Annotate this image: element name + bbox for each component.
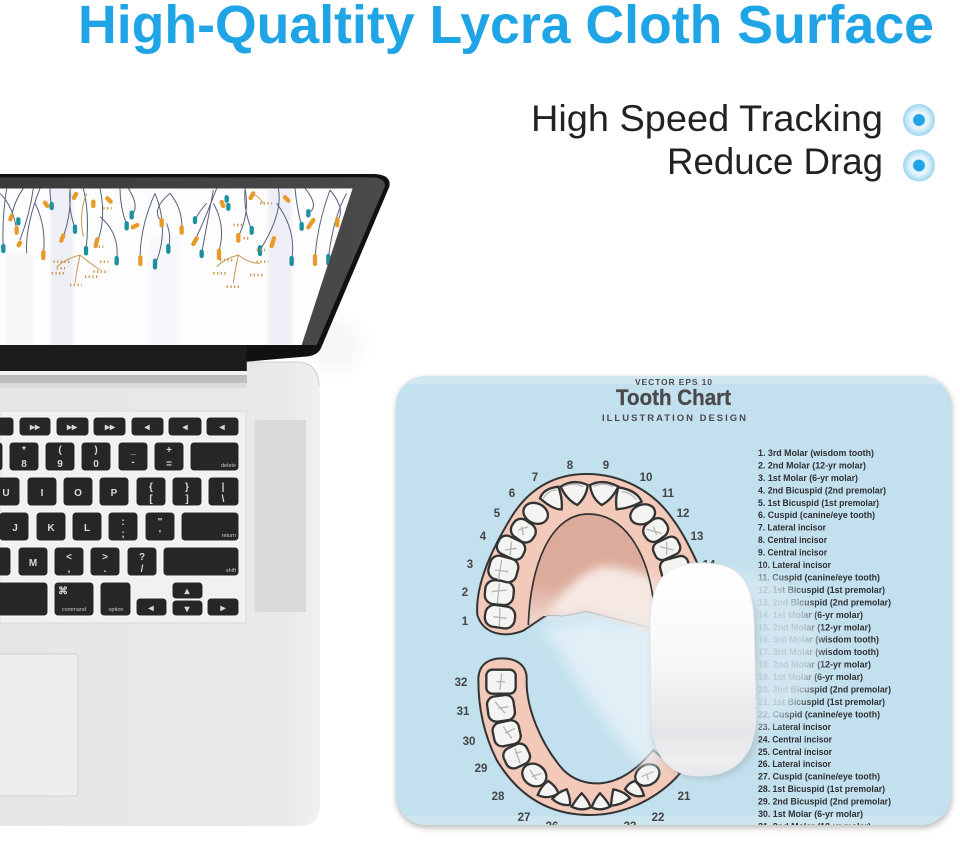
screen wallpaper <box>0 188 353 345</box>
tooth numbers: 31 <box>457 706 470 718</box>
tooth numbers: 2 <box>462 587 468 599</box>
lower gum <box>478 658 680 815</box>
keyboard keys: ⌘ <box>58 586 68 597</box>
keyboard keys: ◂ <box>218 422 225 433</box>
feature: high speed tracking: High Speed Tracking <box>531 98 883 139</box>
tooth legend list: 10. Lateral incisor <box>758 560 831 571</box>
tooth numbers: 6 <box>509 488 515 500</box>
tooth numbers: 29 <box>475 763 487 775</box>
keyboard keys: ◂ <box>143 422 150 433</box>
tooth numbers: 9 <box>603 460 609 472</box>
tooth legend list: 23. Lateral incisor <box>758 722 831 733</box>
keyboard keys: 0 <box>93 459 99 470</box>
tooth numbers: 26 <box>546 821 558 833</box>
tooth numbers: 27 <box>518 812 530 824</box>
hinge strip <box>0 345 247 371</box>
pad surface <box>396 376 951 825</box>
laptop base <box>0 319 361 826</box>
keyboard keys: < <box>66 552 72 563</box>
speaker grille <box>255 420 306 612</box>
tooth legend list: 19. 1st Molar (6-yr molar) <box>758 672 863 683</box>
feature: reduce drag: Reduce Drag <box>667 141 883 182</box>
keyboard keys: return <box>222 533 236 539</box>
mouse reflection over legend <box>682 572 818 728</box>
palate <box>528 514 653 628</box>
keyboard keys: K <box>47 523 55 534</box>
keyboard keys: ▸▸ <box>29 422 41 433</box>
tooth legend list <box>758 448 891 832</box>
tooth legend list: 16. 3rd Molar (wisdom tooth) <box>758 635 879 646</box>
heading: illustration design: ILLUSTRATION DESIGN <box>602 413 746 424</box>
tooth legend list: 28. 1st Bicuspid (1st premolar) <box>758 784 885 795</box>
tooth numbers: 30 <box>463 736 475 748</box>
tooth legend list: 9. Central incisor <box>758 548 827 559</box>
keyboard keys: delete <box>221 463 236 469</box>
feature list <box>531 98 935 182</box>
tooth numbers: 8 <box>567 460 574 472</box>
keyboard keys: ' <box>159 529 161 540</box>
keyboard keys: + <box>166 445 172 456</box>
tooth numbers: 22 <box>652 812 664 824</box>
keyboard keys: ( <box>58 445 62 456</box>
upper teeth <box>484 482 692 630</box>
trackpad <box>0 654 78 796</box>
keyboard keys: command <box>62 607 86 613</box>
keyboard keys: ◂ <box>181 422 188 433</box>
tooth numbers: 11 <box>662 488 675 500</box>
keyboard keys: ▸ <box>219 603 226 614</box>
tooth numbers: 5 <box>494 508 501 520</box>
tooth legend list: 29. 2nd Bicuspid (2nd premolar) <box>758 797 891 808</box>
tooth legend list: 15. 2nd Molar (12-yr molar) <box>758 622 871 633</box>
tooth legend list: 26. Lateral incisor <box>758 759 831 770</box>
tooth numbers: 1 <box>462 616 469 628</box>
keyboard keys: L <box>84 523 90 534</box>
tooth numbers: 32 <box>455 677 467 689</box>
heading: vector eps: VECTOR EPS 10 <box>635 377 712 387</box>
keyboard keys: " <box>158 517 163 528</box>
tooth legend list: 25. Central incisor <box>758 747 832 758</box>
icon: bullet 2 <box>903 150 935 182</box>
tooth numbers: 10 <box>640 472 652 484</box>
tooth numbers: 7 <box>532 472 538 484</box>
keyboard keys: > <box>102 552 108 563</box>
tooth legend list: 8. Central incisor <box>758 535 827 546</box>
keyboard keys: ▴ <box>183 586 190 597</box>
tooth legend list: 14. 1st Molar (6-yr molar) <box>758 610 863 621</box>
tooth numbers: 14 <box>703 560 716 572</box>
palate pale soft tissue <box>547 567 655 628</box>
keyboard keys: / <box>141 564 144 575</box>
tooth legend list: 4. 2nd Bicuspid (2nd premolar) <box>758 485 886 496</box>
keyboard keys: ) <box>94 445 98 456</box>
keyboard keys: 9 <box>57 459 63 470</box>
keyboard keys: O <box>74 488 82 499</box>
keyboard keys: 8 <box>21 459 27 470</box>
tooth legend list: 11. Cuspid (canine/eye tooth) <box>758 572 880 584</box>
palate arch outline <box>528 514 653 625</box>
upper jaw <box>477 474 703 634</box>
tooth numbers <box>455 460 716 833</box>
tooth legend list: 22. Cuspid (canine/eye tooth) <box>758 709 880 720</box>
tooth legend list: 27. Cuspid (canine/eye tooth) <box>758 772 880 783</box>
chart heading <box>602 379 746 421</box>
tooth legend list: 1. 3rd Molar (wisdom tooth) <box>758 448 874 459</box>
tooth legend list: 21. 1st Bicuspid (1st premolar) <box>758 697 885 708</box>
keyboard keys: , <box>68 564 71 575</box>
keyboard keys: [ <box>149 494 153 505</box>
lid frame <box>0 174 390 371</box>
keyboard keys: . <box>104 564 107 575</box>
keyboard keys: ▾ <box>183 604 190 615</box>
keyboard keys: { <box>149 482 153 493</box>
tooth legend list: 3. 1st Molar (6-yr molar) <box>758 473 858 484</box>
lower jaw <box>478 658 680 815</box>
laptop <box>0 174 390 826</box>
tooth legend list: 20. 2nd Bicuspid (2nd premolar) <box>758 684 891 696</box>
icon: bullet 1 <box>903 104 935 136</box>
keyboard keys: ▸▸ <box>104 422 116 433</box>
keyboard keys: U <box>2 488 10 499</box>
mouse body <box>650 563 756 776</box>
gum outline <box>477 474 703 634</box>
laptop lid and screen <box>0 174 390 371</box>
tooth legend list: 13. 2nd Bicuspid (2nd premolar) <box>758 597 891 608</box>
keyboard keys: : <box>121 517 125 528</box>
tooth numbers: 12 <box>677 508 689 520</box>
keyboard keys: J <box>12 523 18 534</box>
tooth legend list: 2. 2nd Molar (12-yr molar) <box>758 460 866 471</box>
tooth numbers: 3 <box>467 559 473 571</box>
keyboard keys: ◂ <box>147 603 154 614</box>
keyboard keys: option <box>108 607 124 613</box>
tooth numbers: 23 <box>624 821 636 833</box>
tooth legend list: 31. 2nd Molar (12-yr molar) <box>758 822 871 832</box>
keyboard keys <box>0 417 239 616</box>
keyboard keys: * <box>22 445 26 456</box>
keyboard keys: ; <box>121 529 125 540</box>
tooth numbers: 13 <box>691 531 703 543</box>
keyboard keys: I <box>41 488 44 499</box>
upper gum <box>477 474 703 634</box>
keyboard keys: = <box>166 459 172 470</box>
keyboard keys: \ <box>222 494 225 505</box>
keyboard keys: ] <box>185 494 189 505</box>
mouse shadow <box>652 575 758 779</box>
keyboard keys: shift <box>226 568 236 574</box>
keyboard keys: | <box>222 482 225 493</box>
mouse pad <box>396 376 952 833</box>
keyboard keys: - <box>131 457 135 468</box>
heading: tooth chart: Tooth Chart <box>616 385 732 410</box>
keyboard keys: _ <box>129 445 136 456</box>
keyboard keys: } <box>185 482 189 493</box>
mouse <box>650 563 758 779</box>
tooth numbers: 4 <box>480 531 487 543</box>
tooth legend list: 18. 2nd Molar (12-yr molar) <box>758 660 871 671</box>
tooth numbers: 28 <box>492 791 505 803</box>
keyboard keys: ? <box>139 552 145 563</box>
keyboard well <box>0 411 246 623</box>
tooth legend list: 5. 1st Bicuspid (1st premolar) <box>758 498 879 509</box>
mouse reflection on pad <box>537 618 660 770</box>
tooth legend list: 24. Central incisor <box>758 734 832 745</box>
tooth legend list: 12. 1st Bicuspid (1st premolar) <box>758 585 885 596</box>
keyboard keys: P <box>111 488 118 499</box>
tooth legend list: 6. Cuspid (canine/eye tooth) <box>758 510 875 521</box>
pad artwork <box>455 377 891 833</box>
tooth numbers: 21 <box>678 791 691 803</box>
tooth legend list: 17. 3rd Molar (wisdom tooth) <box>758 647 879 658</box>
tooth legend list: 30. 1st Molar (6-yr molar) <box>758 809 863 820</box>
lower teeth <box>486 670 663 809</box>
palate lower line <box>547 612 653 628</box>
tooth legend list: 7. Lateral incisor <box>758 523 826 534</box>
keyboard keys: ▸▸ <box>66 422 78 433</box>
keyboard keys: M <box>29 558 37 569</box>
